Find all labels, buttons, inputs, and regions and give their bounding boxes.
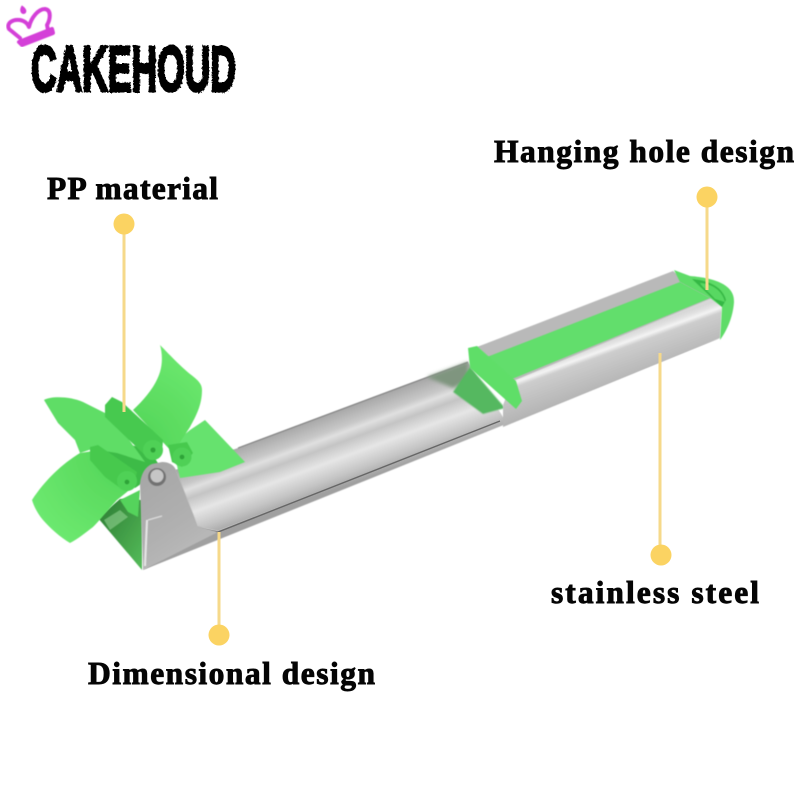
green blades xyxy=(32,345,245,543)
product: watermelon cutter xyxy=(32,270,734,570)
leader line xyxy=(218,532,220,635)
metal bracket with rivet xyxy=(140,462,218,570)
green slider xyxy=(468,346,522,409)
callout: stainless steel xyxy=(551,353,759,610)
tray wall and interior xyxy=(175,362,505,531)
marker dot xyxy=(208,624,230,646)
hub xyxy=(100,440,162,488)
leader line xyxy=(706,197,708,290)
marker dot xyxy=(114,214,134,234)
dark green underside xyxy=(98,499,142,570)
logo: CAKEHOUD xyxy=(8,6,236,105)
leader line xyxy=(658,353,662,555)
left blade xyxy=(44,397,145,462)
label: PP material xyxy=(47,171,218,206)
icon: purple crown xyxy=(8,6,53,45)
end cap with hanging hole xyxy=(674,270,734,340)
marker dot xyxy=(696,186,718,208)
top blade xyxy=(133,345,202,453)
green handle strip xyxy=(487,282,710,379)
right blade xyxy=(172,420,245,478)
small lower blade xyxy=(120,490,140,517)
tray front wall xyxy=(143,338,720,570)
rollers xyxy=(105,397,163,460)
lower left blade xyxy=(32,450,133,543)
logo wordmark: CAKEHOUD xyxy=(31,33,236,105)
leader line xyxy=(122,224,126,412)
label: stainless steel xyxy=(551,575,759,610)
label: Dimensional design xyxy=(88,656,375,691)
handle front face xyxy=(503,298,722,427)
handle top face xyxy=(477,271,712,381)
callout: Dimensional design xyxy=(88,532,375,691)
label: Hanging hole design xyxy=(494,134,794,169)
marker dot xyxy=(650,544,672,566)
callout: PP material xyxy=(47,171,218,412)
callout: Hanging hole design xyxy=(494,134,794,290)
